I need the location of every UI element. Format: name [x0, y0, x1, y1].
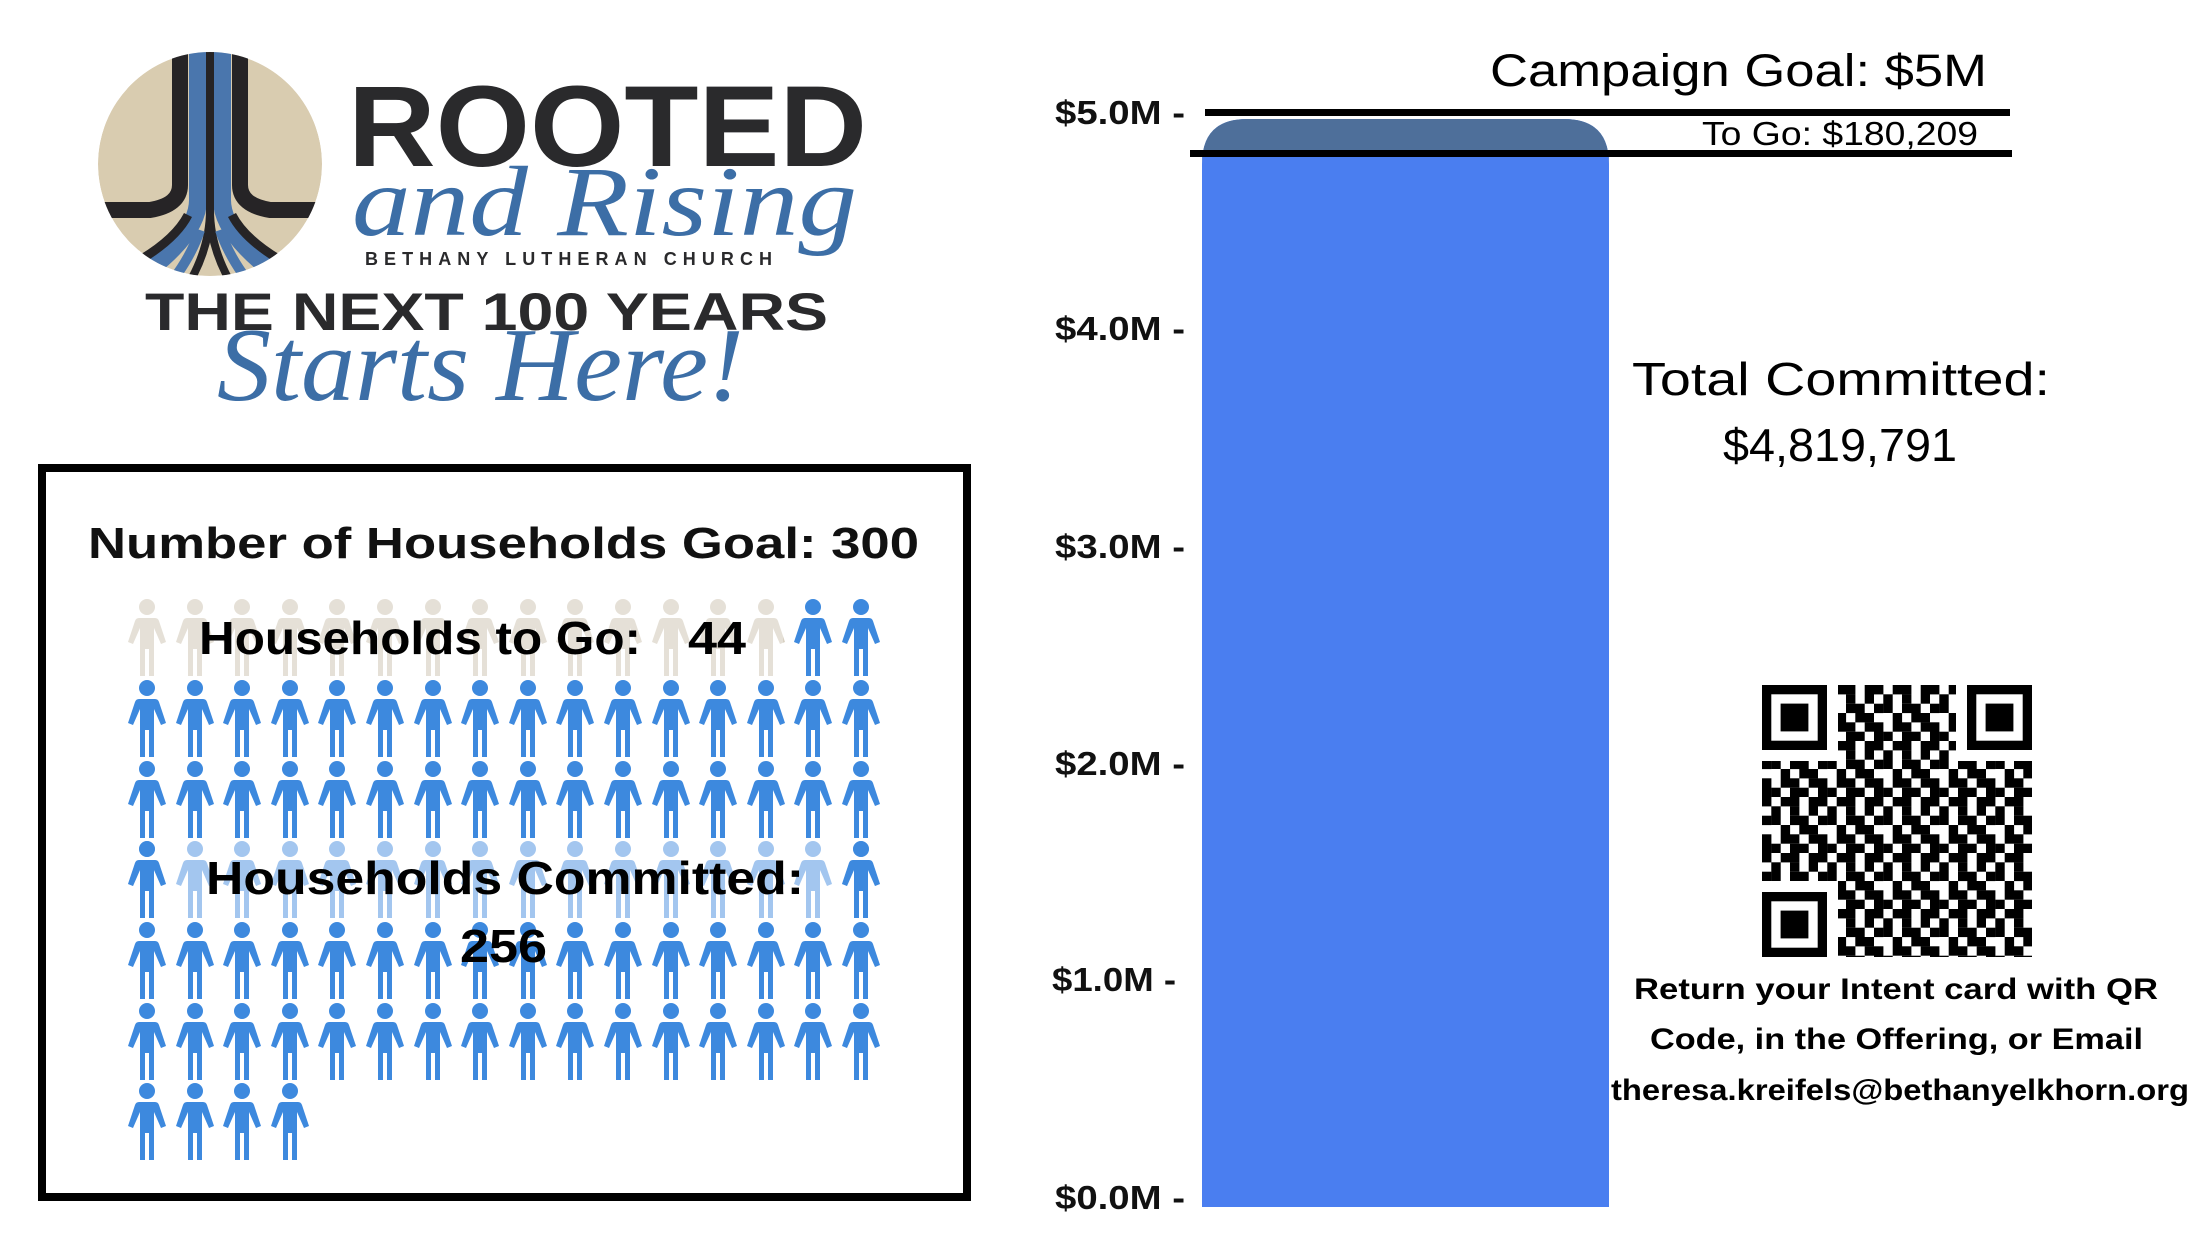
y axis labels: $2.0M - — [1055, 745, 1185, 782]
instructions text: Return your Intent card with QR — [1634, 973, 2158, 1006]
value: 256: 256 — [460, 920, 547, 972]
instructions text: theresa.kreifels@bethanyelkhorn.org — [1611, 1074, 2189, 1107]
QR code — [1760, 683, 2034, 959]
title: ROOTED: ROOTED — [348, 63, 867, 191]
committed line — [1190, 150, 2012, 157]
y axis labels: $1.0M - — [1052, 961, 1176, 998]
church name: BETHANY LUTHERAN CHURCH — [365, 249, 772, 269]
panel: households — [42, 468, 967, 1197]
instructions text — [1611, 973, 2189, 1107]
y axis labels: $3.0M - — [1055, 528, 1185, 565]
instructions text: Code, in the Offering, or Email — [1650, 1023, 2143, 1056]
y axis labels: $5.0M - — [1055, 94, 1185, 131]
tagline: starts here: Starts Here! — [217, 306, 744, 423]
y axis labels: $0.0M - — [1055, 1179, 1185, 1216]
goal line — [1205, 109, 2010, 116]
bar: total committed — [1202, 119, 1609, 1207]
label: total committed: Total Committed: — [1632, 353, 2050, 405]
tagline: the next 100 years: THE NEXT 100 YEARS — [145, 283, 828, 342]
label: households to go: Households to Go: — [199, 612, 641, 664]
y axis labels: $4.0M - — [1055, 310, 1185, 347]
subtitle: and Rising: and Rising — [352, 146, 857, 257]
people pictogram grid — [123, 599, 880, 1160]
value: 44: 44 — [688, 612, 746, 664]
label: households committed: Households Committed: — [206, 852, 804, 904]
label: to go: To Go: $180,209 — [1702, 115, 1978, 152]
heading: households goal: Number of Households Goal: 300 — [88, 519, 919, 568]
logo emblem — [98, 52, 322, 276]
label: campaign goal: Campaign Goal: $5M — [1490, 45, 1987, 96]
value: total committed: $4,819,791 — [1723, 419, 1957, 471]
y axis labels — [1052, 94, 1185, 1216]
